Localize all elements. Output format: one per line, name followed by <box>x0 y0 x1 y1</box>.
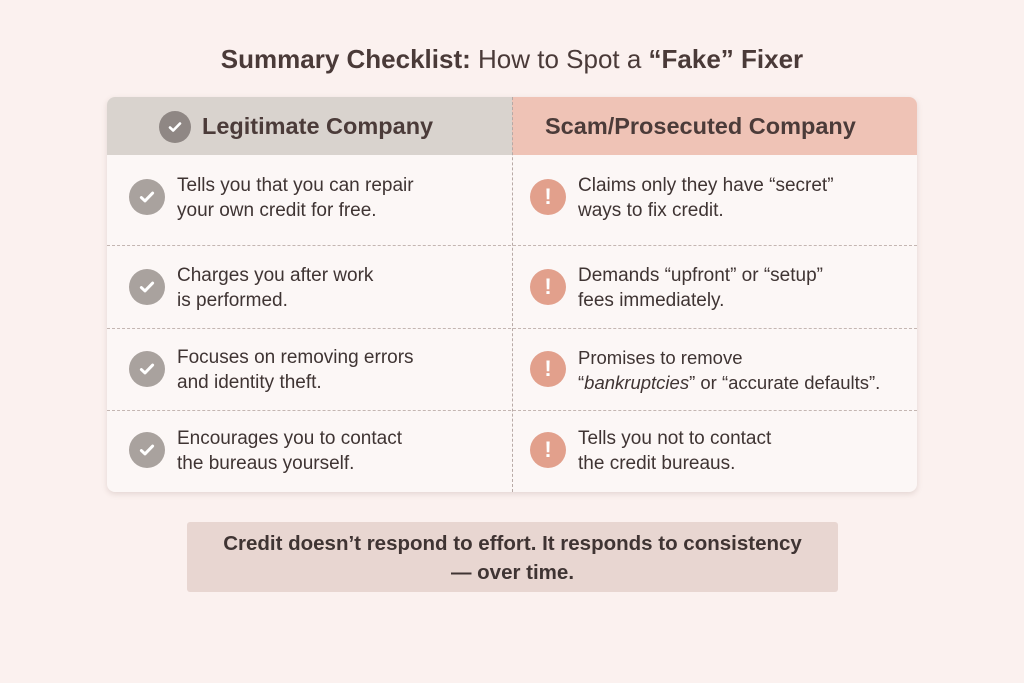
header icon: check <box>159 111 191 143</box>
row 3 right <box>530 347 880 393</box>
panel: comparison table: ! <box>544 184 552 209</box>
panel: comparison table: Focuses on removing errors <box>177 347 414 368</box>
row 2 left <box>129 265 374 311</box>
row 2 right <box>530 265 823 311</box>
callout: quote <box>187 522 838 592</box>
header: scam <box>512 97 917 155</box>
panel: comparison table: ways to fix credit. <box>578 200 724 221</box>
panel: comparison table: ! <box>544 356 552 381</box>
panel: comparison table: ! <box>544 274 552 299</box>
panel: comparison table: ! <box>544 437 552 462</box>
panel: comparison table: Encourages you to contact <box>177 428 402 449</box>
panel: comparison table: Demands “upfront” or “setup” <box>578 265 823 286</box>
row 4 right <box>530 428 772 474</box>
title: Summary Checklist: How to Spot a “Fake” Fixer <box>221 44 803 74</box>
panel: comparison table: and identity theft. <box>177 372 322 393</box>
panel: comparison table: is performed. <box>177 290 288 311</box>
header: legitimate <box>107 97 512 155</box>
panel: comparison table: Tells you not to contact <box>578 428 771 449</box>
panel: comparison table: Charges you after work <box>177 265 373 286</box>
header text: legitimate: Legitimate Company <box>202 113 433 139</box>
panel: comparison table: fees immediately. <box>578 290 724 311</box>
callout: quote: — over time. <box>451 561 574 584</box>
panel: comparison table: your own credit for free. <box>177 200 377 221</box>
panel: comparison table: the bureaus yourself. <box>177 453 354 474</box>
callout: quote: Credit doesn’t respond to effort. It responds to consistency <box>223 532 802 555</box>
row 3 left <box>129 347 414 393</box>
panel: comparison table: the credit bureaus. <box>578 453 735 474</box>
panel: comparison table: Promises to remove <box>578 347 742 368</box>
panel: comparison table: “bankruptcies” or “accurate defaults”. <box>578 372 880 393</box>
row 4 left <box>129 428 402 474</box>
header text: scam: Scam/Prosecuted Company <box>545 113 856 139</box>
row 1 right <box>530 175 834 221</box>
panel: comparison table <box>107 97 917 492</box>
row 1 left <box>129 175 414 221</box>
panel: comparison table: Claims only they have “secret” <box>578 175 834 196</box>
panel: comparison table: Tells you that you can repair <box>177 175 414 196</box>
